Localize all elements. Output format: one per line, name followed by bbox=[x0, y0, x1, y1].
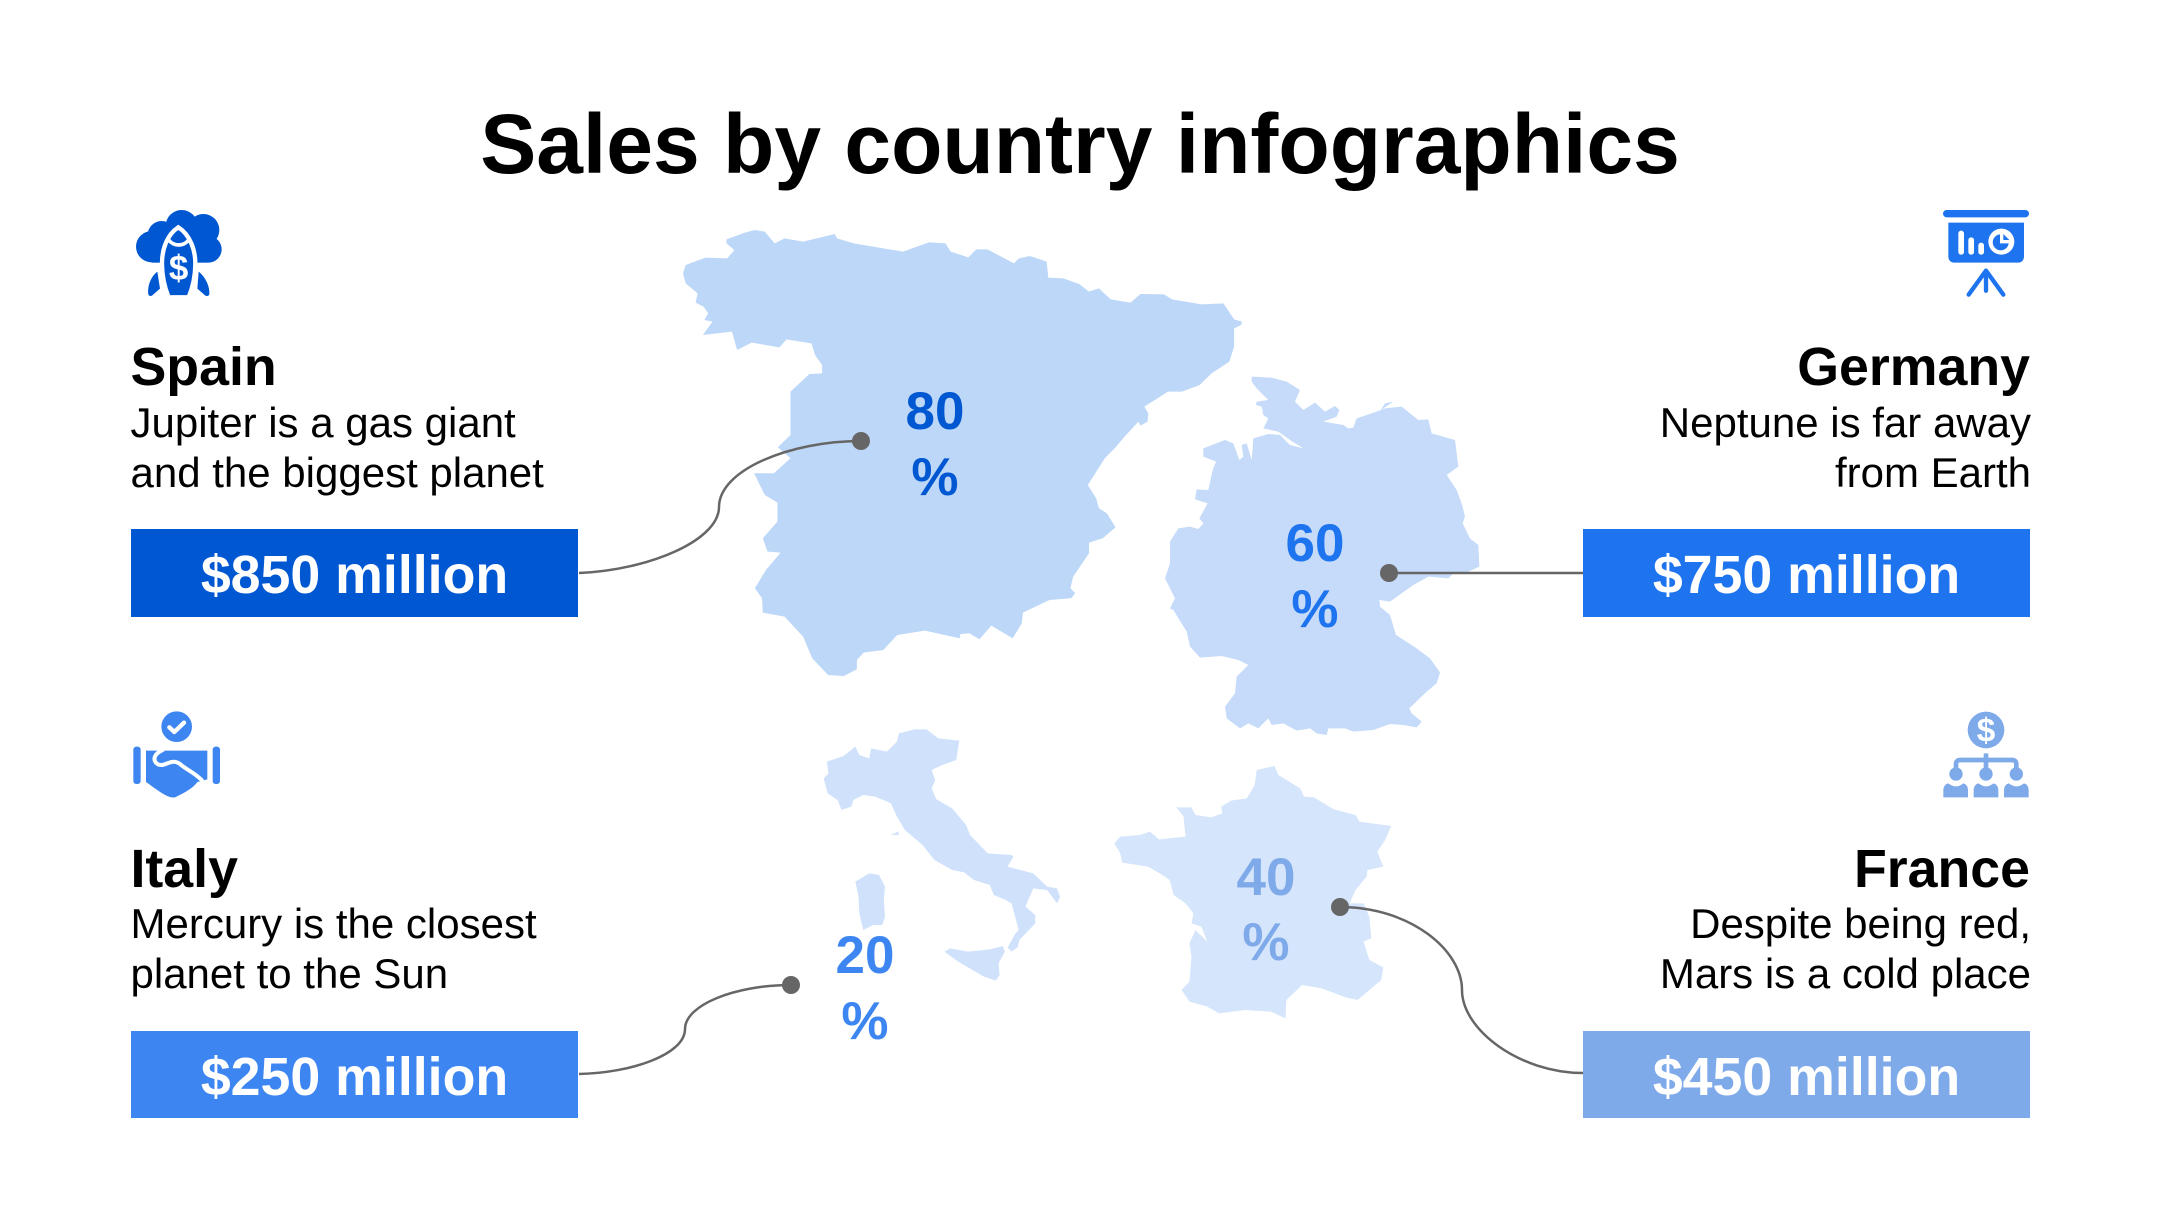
value bar: Spain: $850 million bbox=[201, 545, 508, 605]
description: Italy bbox=[130, 900, 537, 997]
value bar: Spain bbox=[131, 529, 578, 617]
description: Spain: and the biggest planet bbox=[130, 449, 544, 496]
percentage: Italy 20% bbox=[836, 926, 894, 1051]
description: Spain bbox=[130, 399, 544, 496]
percentage: Germany 60%: 60 bbox=[1286, 514, 1344, 573]
description: Spain: Jupiter is a gas giant bbox=[130, 399, 516, 446]
description: Germany bbox=[1660, 399, 2031, 496]
description: Germany: from Earth bbox=[1835, 449, 2031, 496]
panel: Germany bbox=[1583, 210, 2031, 617]
heading: Germany: Germany bbox=[1797, 337, 2030, 397]
description: Italy: Mercury is the closest bbox=[130, 900, 537, 947]
description: Germany: Neptune is far away bbox=[1660, 399, 2031, 446]
icon: rocket and cloud: $ bbox=[169, 249, 188, 288]
percentage: Spain 80%: % bbox=[911, 448, 959, 507]
percentage: Germany 60% bbox=[1286, 514, 1344, 639]
icon: presentation board bbox=[1943, 210, 2029, 295]
icon: handshake with check bbox=[133, 711, 220, 798]
connector: Germany bbox=[1380, 564, 1583, 582]
description: France: Mars is a cold place bbox=[1660, 950, 2031, 997]
map: France bbox=[1114, 766, 1391, 1018]
icon: dollar org chart bbox=[1943, 712, 2029, 797]
map: Italy bbox=[824, 729, 1060, 981]
map: Spain bbox=[683, 230, 1242, 676]
value bar: Italy bbox=[131, 1031, 578, 1118]
icon: rocket and cloud bbox=[136, 210, 222, 297]
value bar: France: $450 million bbox=[1653, 1047, 1960, 1107]
heading: Spain: Spain bbox=[130, 337, 277, 397]
title: Sales by country infographics bbox=[480, 97, 1680, 191]
description: France: Despite being red, bbox=[1690, 900, 2031, 947]
panel: France bbox=[1583, 712, 2031, 1118]
panel: Spain bbox=[130, 210, 578, 617]
heading: France: France bbox=[1854, 839, 2030, 899]
heading: Italy: Italy bbox=[130, 839, 238, 899]
percentage: Germany 60%: % bbox=[1291, 580, 1339, 639]
value bar: Italy: $250 million bbox=[201, 1047, 508, 1107]
value bar: France bbox=[1583, 1031, 2030, 1118]
percentage: Italy 20%: % bbox=[841, 992, 889, 1051]
description: Italy: planet to the Sun bbox=[130, 950, 448, 997]
value bar: Germany bbox=[1583, 529, 2030, 617]
percentage: France 40%: 40 bbox=[1237, 848, 1295, 907]
panel: Italy bbox=[130, 711, 578, 1118]
value bar: Germany: $750 million bbox=[1653, 545, 1960, 605]
percentage: France 40% bbox=[1237, 848, 1295, 972]
percentage: Spain 80% bbox=[906, 382, 964, 507]
map: Germany bbox=[1165, 377, 1479, 735]
percentage: Spain 80%: 80 bbox=[906, 382, 964, 441]
icon: dollar org chart: $ bbox=[1977, 713, 1996, 750]
connector: France bbox=[1331, 898, 1583, 1073]
description: France bbox=[1660, 900, 2031, 997]
percentage: Italy 20%: 20 bbox=[836, 926, 894, 985]
connector: Italy bbox=[579, 976, 800, 1074]
percentage: France 40%: % bbox=[1242, 913, 1290, 972]
connector: Spain bbox=[579, 432, 870, 573]
